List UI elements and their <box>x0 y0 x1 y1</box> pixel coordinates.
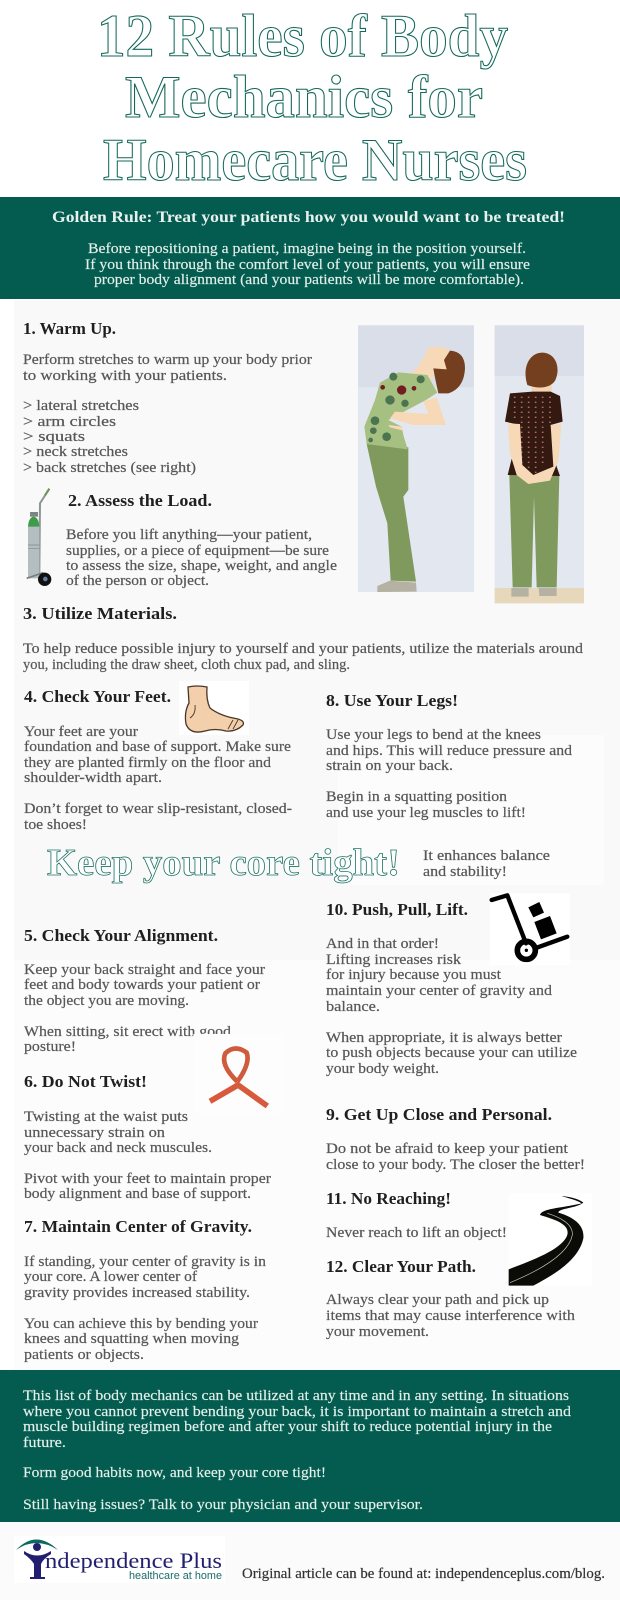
rule 4: check your feet <box>24 687 292 833</box>
rule 12: clear your path: 12. Clear Your Path. <box>326 1257 476 1276</box>
rule 6: do not twist: Twisting at the waist puts <box>24 1109 188 1125</box>
rule 3: utilize materials <box>23 604 584 673</box>
rule 11: no reaching: 11. No Reaching! <box>326 1189 451 1208</box>
rule 10: push, pull, lift: maintain your center of gravity and <box>326 983 553 999</box>
rule 5: check your alignment: posture! <box>24 1039 76 1055</box>
rule 3: utilize materials: you, including the draw sheet, cloth chux pad, and sling. <box>23 657 350 673</box>
rule 8: use your legs: strain on your back. <box>326 758 453 774</box>
rule 2: assess the load: 2. Assess the Load. <box>68 491 212 510</box>
rule 12: clear your path: Always clear your path and pick up <box>326 1292 549 1308</box>
rule 10: push, pull, lift: to push objects because your can utilize <box>326 1045 577 1061</box>
rule 9: get up close and personal: Do not be afraid to keep your patient <box>326 1141 569 1157</box>
rule 10: push, pull, lift: And in that order! <box>326 936 439 952</box>
callout: keep your core tight: Keep your core tight! <box>47 842 400 884</box>
panel: closing summary: muscle building regimen before and after your shift to reduce potential injury in the <box>23 1419 552 1435</box>
logo: independence plus: healthcare at home <box>129 1570 222 1582</box>
rule 5: check your alignment: 5. Check Your Alignment. <box>24 926 218 945</box>
rule 12: clear your path <box>326 1257 576 1340</box>
title: Homecare Nurses <box>103 127 527 193</box>
logo: independence plus: ndependence Plus <box>45 1548 222 1573</box>
rule 12: clear your path: items that may cause interference with <box>326 1308 576 1324</box>
callout: keep your core tight <box>47 842 550 884</box>
golden rule heading: Golden Rule: Treat your patients how you would want to be treated! <box>52 209 565 226</box>
rule 4: check your feet: Don’t forget to wear slip-resistant, closed- <box>24 801 292 817</box>
rule 2: assess the load: Before you lift anything—your patient, <box>66 527 312 543</box>
panel: closing summary: Still having issues? Talk to your physician and your supervisor. <box>23 1497 423 1513</box>
title <box>97 3 527 193</box>
rule 4: check your feet: they are planted firmly on the floor and <box>24 755 272 771</box>
rule 2: assess the load: of the person or object. <box>66 573 209 589</box>
rule 7: maintain center of gravity <box>24 1217 267 1363</box>
rule 5: check your alignment: feet and body towards your patient or <box>24 977 260 993</box>
rule 1: warm up <box>23 319 312 476</box>
rule 7: maintain center of gravity: 7. Maintain Center of Gravity. <box>24 1217 252 1236</box>
callout: keep your core tight: It enhances balance <box>423 848 550 864</box>
panel: closing summary: This list of body mechanics can be utilized at any time and in any setting. In situations <box>23 1388 569 1404</box>
golden rule text: Before repositioning a patient, imagine being in the position yourself. <box>88 241 526 257</box>
rule 1: warm up: > arm circles <box>23 414 116 430</box>
panel: footer <box>0 1522 620 1600</box>
rule 4: check your feet: Your feet are your <box>24 724 138 740</box>
rule 10: push, pull, lift: your body weight. <box>326 1061 439 1077</box>
rule 8: use your legs: Begin in a squatting position <box>326 789 508 805</box>
rule 2: assess the load <box>66 491 337 589</box>
logo: independence plus <box>14 1536 225 1583</box>
rule 1: warm up: > lateral stretches <box>23 398 139 414</box>
title: Mechanics for <box>125 64 483 130</box>
rule 7: maintain center of gravity: gravity provides increased stability. <box>24 1285 250 1301</box>
rule 1: warm up: > back stretches (see right) <box>23 460 196 476</box>
rule 4: check your feet: shoulder-width apart. <box>24 770 162 786</box>
icon: hand truck <box>490 893 570 965</box>
illustration: nurse stretching back, side view <box>358 325 474 592</box>
rule 9: get up close and personal: 9. Get Up Close and Personal. <box>326 1105 552 1124</box>
rule 8: use your legs: and use your leg muscles to lift! <box>326 805 526 821</box>
rule 4: check your feet: 4. Check Your Feet. <box>24 687 171 706</box>
rule 10: push, pull, lift: Lifting increases risk <box>326 952 462 968</box>
rule 6: do not twist: body alignment and base of support. <box>24 1186 251 1202</box>
rule 2: assess the load: to assess the size, shape, weight, and angle <box>66 558 337 574</box>
golden rule text: If you think through the comfort level of your patients, you will ensure <box>85 257 530 273</box>
icon: oxygen tank on cart <box>27 489 51 586</box>
rule 5: check your alignment: Keep your back straight and face your <box>24 962 265 978</box>
icon: winding road <box>509 1193 592 1286</box>
illustration: nurse stretching back, rear view <box>495 325 584 603</box>
panel: closing summary: where you cannot prevent bending your back, it is important to maintain a stretch and <box>23 1404 572 1420</box>
source credit: Original article can be found at: independenceplus.com/blog. <box>242 1566 605 1582</box>
callout: keep your core tight: and stability! <box>423 864 507 880</box>
rule 10: push, pull, lift: for injury because you must <box>326 967 502 983</box>
icon: twisted ribbon <box>193 1034 283 1114</box>
rule 8: use your legs: and hips. This will reduce pressure and <box>326 743 573 759</box>
panel: closing summary: future. <box>23 1435 66 1451</box>
rule 6: do not twist: unnecessary strain on <box>24 1125 166 1141</box>
rule 7: maintain center of gravity: patients or objects. <box>24 1347 144 1363</box>
panel: closing summary: Form good habits now, and keep your core tight! <box>23 1465 326 1481</box>
rule 9: get up close and personal <box>326 1105 585 1173</box>
rule 1: warm up: > neck stretches <box>23 444 128 460</box>
rule 6: do not twist: your back and neck muscules. <box>24 1140 212 1156</box>
rule 8: use your legs <box>326 691 573 821</box>
rule 7: maintain center of gravity: If standing, your center of gravity is in <box>24 1254 267 1270</box>
rule 11: no reaching: Never reach to lift an object! <box>326 1225 507 1241</box>
rule 5: check your alignment: the object you are moving. <box>24 993 189 1009</box>
rule 4: check your feet: foundation and base of support. Make sure <box>24 739 291 755</box>
rule 10: push, pull, lift: balance. <box>326 999 380 1015</box>
icon: foot <box>179 681 249 735</box>
rule 7: maintain center of gravity: knees and squatting when moving <box>24 1331 240 1347</box>
rule 3: utilize materials: To help reduce possible injury to yourself and your patients, utilize the materials around <box>23 641 584 657</box>
golden rule text <box>85 241 530 288</box>
rule 8: use your legs: Use your legs to bend at the knees <box>326 727 541 743</box>
rule 6: do not twist: 6. Do Not Twist! <box>24 1072 147 1091</box>
rule 11: no reaching <box>326 1189 507 1241</box>
rule 10: push, pull, lift: When appropriate, it is always better <box>326 1030 562 1046</box>
panel: closing summary <box>0 1370 620 1522</box>
rule 9: get up close and personal: close to your body. The closer the better! <box>326 1157 585 1173</box>
rule 3: utilize materials: 3. Utilize Materials. <box>23 604 177 623</box>
rule 10: push, pull, lift <box>326 900 577 1077</box>
rule 10: push, pull, lift: 10. Push, Pull, Lift. <box>326 900 468 919</box>
rule 8: use your legs: 8. Use Your Legs! <box>326 691 458 710</box>
rule 7: maintain center of gravity: your core. A lower center of <box>24 1269 197 1285</box>
rule 5: check your alignment <box>24 926 265 1055</box>
rule 1: warm up: 1. Warm Up. <box>23 319 116 338</box>
rule 1: warm up: Perform stretches to warm up your body prior <box>23 352 312 368</box>
title: 12 Rules of Body <box>97 3 508 69</box>
panel: golden rule <box>0 197 620 299</box>
rule 1: warm up: > squats <box>23 429 85 445</box>
rule 4: check your feet: toe shoes! <box>24 817 87 833</box>
rule 7: maintain center of gravity: You can achieve this by bending your <box>24 1316 258 1332</box>
rule 6: do not twist <box>24 1072 271 1202</box>
rule 12: clear your path: your movement. <box>326 1324 429 1340</box>
rule 6: do not twist: Pivot with your feet to maintain proper <box>24 1171 271 1187</box>
panel: rules background <box>14 300 620 1370</box>
rule 2: assess the load: supplies, or a piece of equipment—be sure <box>66 543 329 559</box>
rule 5: check your alignment: When sitting, sit erect with good <box>24 1024 232 1040</box>
rule 1: warm up: to working with your patients. <box>23 368 227 384</box>
golden rule text: proper body alignment (and your patients will be more comfortable). <box>94 272 524 288</box>
